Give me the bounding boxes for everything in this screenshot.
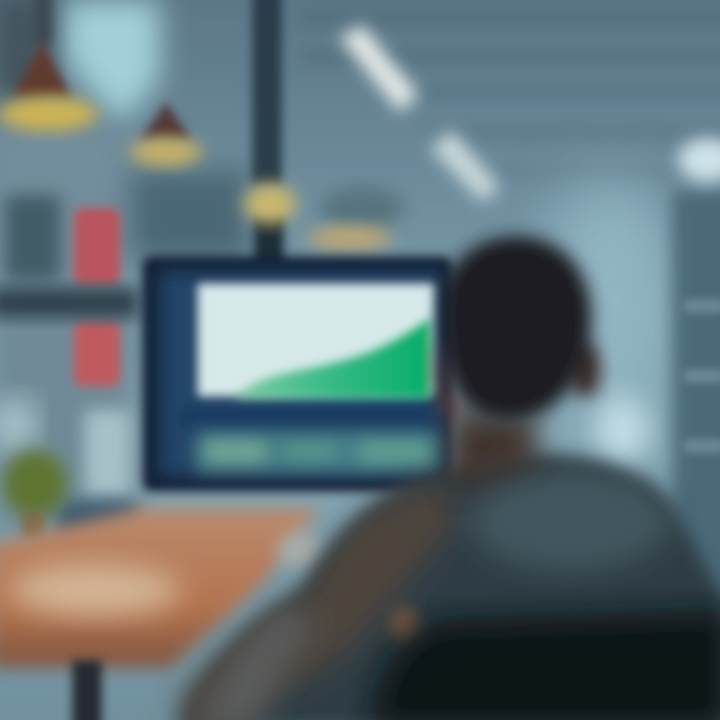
ceiling light strips [340,25,500,202]
icon: red books on shelves [74,208,120,386]
dark central column [244,0,296,265]
office chair back [370,610,720,720]
chart: screen with green area [198,284,434,398]
icon: small pendant lamp [130,102,202,166]
person: torso and arm [180,454,720,720]
panel: upper left wall and shelving [0,0,250,530]
person: neck [450,410,540,490]
distant desk objects [308,186,404,250]
lower screen data strip [196,432,440,472]
person: head with dark hair [433,236,601,420]
icon: potted plant [3,450,138,542]
panel: wooden desk [0,508,322,720]
icon: large pendant lamp [0,0,98,131]
panel: computer monitor [142,256,452,492]
shelf board [0,288,138,318]
panel: right side building [672,138,720,610]
